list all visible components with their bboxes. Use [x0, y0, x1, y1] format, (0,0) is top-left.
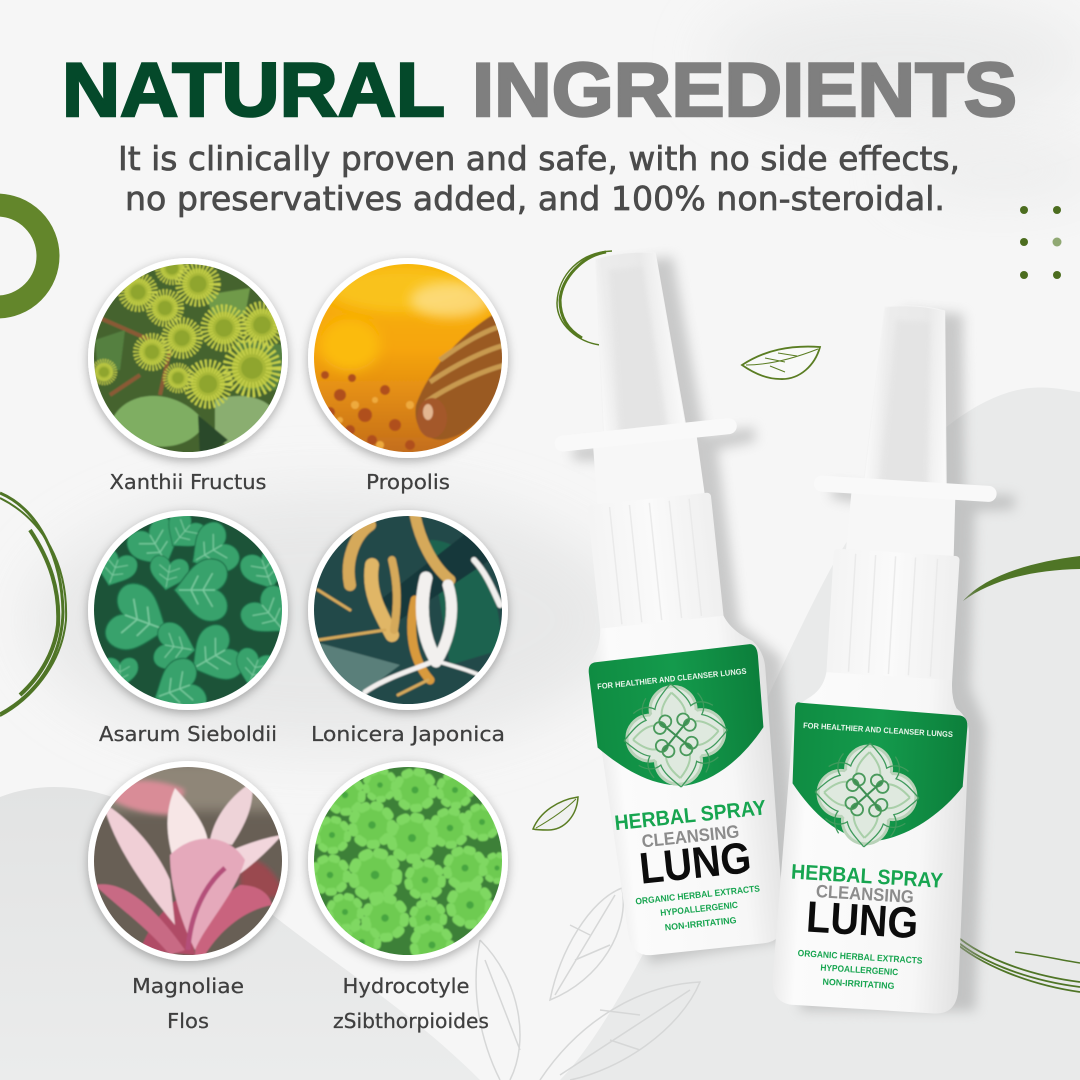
ingredient: Lonicera Japonica: [308, 510, 508, 710]
brush arc right bottom: [950, 930, 1080, 992]
leaf icon lower: [533, 797, 578, 830]
label: Hydrocotyle Sibthorpioides: Hydrocotyle: [342, 974, 470, 998]
knot emblem right: [812, 740, 922, 850]
photo: xanthii: [94, 264, 282, 452]
claims left: HYPOALLERGENIC: [660, 900, 739, 918]
bottle body left: [586, 612, 794, 958]
green label right: [787, 702, 968, 847]
label: Magnoliae Flos: [132, 974, 244, 1033]
claims right: [796, 948, 923, 993]
brush arc right top: [963, 556, 1080, 601]
product name right: LUNG: [805, 893, 920, 948]
nozzle and collar left: [536, 243, 744, 510]
claims right: NON-IRRITATING: [822, 977, 895, 991]
product name right: HERBAL SPRAY: [790, 861, 944, 893]
label: Hydrocotyle Sibthorpioides: zSibthorpioides: [333, 1009, 489, 1033]
bottle body right: [771, 670, 977, 1015]
label: Xanthii Fructus: Xanthii Fructus: [110, 470, 266, 494]
bottle right shadow: [794, 306, 1026, 1021]
photo: hydrocotyle: [314, 767, 502, 955]
bottle left shadow: [553, 250, 812, 966]
product name right: CLEANSING: [815, 881, 914, 907]
product name left: [614, 796, 773, 896]
leaf icon top: [742, 347, 820, 379]
ingredient: Magnoliae Flos: [88, 761, 288, 961]
label: Magnoliae Flos: Magnoliae: [132, 974, 244, 998]
bottle right: [771, 300, 1008, 1015]
product name left: CLEANSING: [641, 821, 740, 851]
ingredient: Hydrocotyle Sibthorpioides: [308, 761, 510, 963]
label: Asarum Sieboldii: Asarum Sieboldii: [99, 722, 277, 746]
ingredient: Propolis: [308, 258, 510, 458]
title: [62, 48, 1017, 133]
photo: magnolia: [94, 767, 282, 955]
label tagline right: FOR HEALTHIER AND CLEANSER LUNGS: [803, 721, 954, 739]
ingredient: Asarum Sieboldii: [88, 505, 304, 725]
photo: propolis: [314, 264, 502, 452]
claims right: ORGANIC HERBAL EXTRACTS: [797, 948, 923, 966]
bottle left: [536, 243, 794, 960]
decorative ring top left: [0, 205, 48, 307]
claims right: HYPOALLERGENIC: [820, 962, 899, 977]
brush circle left: [0, 493, 66, 716]
title word: natural: NATURAL: [62, 48, 445, 133]
title word: ingredients: INGREDIENTS: [472, 48, 1017, 133]
dot grid top right: [1020, 206, 1062, 279]
label tagline left: FOR HEALTHIER AND CLEANSER LUNGS: [597, 667, 748, 691]
cap right: [826, 549, 960, 684]
knot emblem left: [619, 678, 733, 792]
label: Lonicera Japonica: Lonicera Japonica: [311, 722, 505, 746]
photo: asarum: [94, 516, 282, 704]
product name left: HERBAL SPRAY: [614, 796, 767, 835]
subtitle: no preservatives added, and 100% non-steroidal.: [125, 179, 945, 218]
product name left: LUNG: [637, 833, 754, 894]
subtitle: [118, 139, 960, 218]
photo: lonicera: [314, 516, 502, 704]
ingredient: Xanthii Fructus: [88, 255, 288, 460]
brush arc near left bottle: [557, 251, 612, 345]
claims left: ORGANIC HERBAL EXTRACTS: [635, 883, 760, 906]
label: Magnoliae Flos: Flos: [167, 1009, 209, 1033]
subtitle: It is clinically proven and safe, with no side effects,: [118, 139, 960, 178]
label: Hydrocotyle Sibthorpioides: [333, 974, 489, 1033]
line art leaves bottom: [476, 888, 700, 1080]
claims left: NON-IRRITATING: [664, 915, 737, 933]
label: Propolis: Propolis: [366, 470, 450, 494]
nozzle and collar right: [810, 301, 1008, 560]
product name right: [787, 861, 944, 950]
claims left: [635, 883, 763, 935]
green label left: [588, 643, 771, 794]
cap left: [587, 492, 724, 633]
